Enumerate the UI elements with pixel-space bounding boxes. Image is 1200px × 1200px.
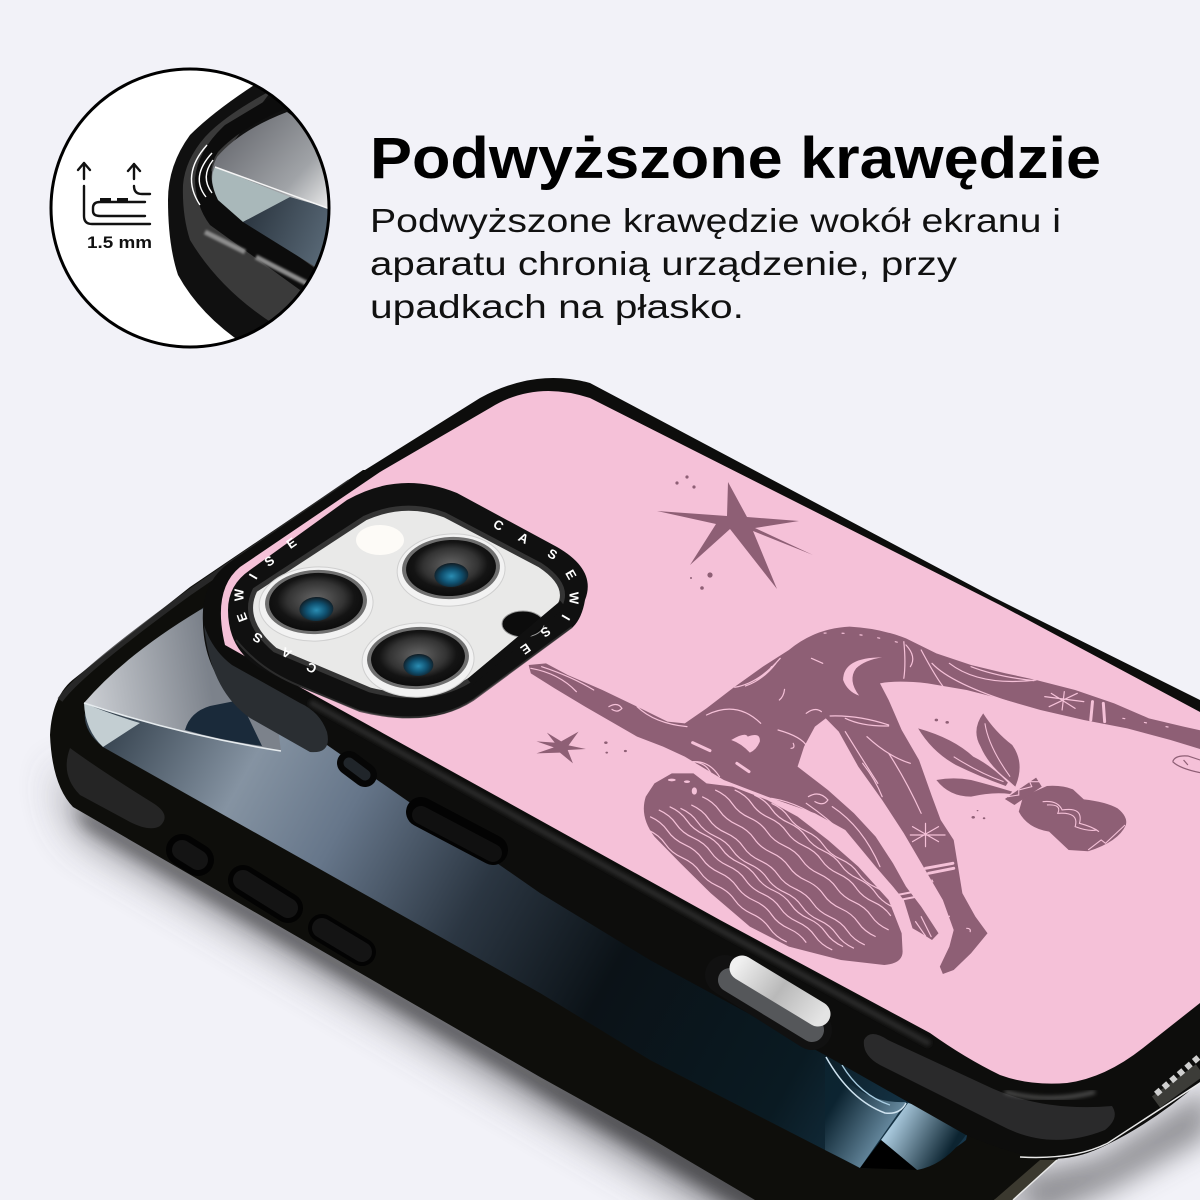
figure body silhouette: [529, 627, 1200, 974]
figure in zoomed coordinates: [529, 627, 1200, 974]
screen pale glass wedge: [84, 703, 140, 747]
ring text: CASEWISE twice: C: [303, 659, 319, 677]
charging port: [725, 968, 818, 1030]
sensor hole: [502, 611, 544, 637]
ring text: CASEWISE twice: E: [517, 640, 533, 658]
front band highlight: [310, 702, 930, 1044]
hair: [644, 773, 903, 965]
ring text: CASEWISE twice: [231, 516, 582, 677]
front left bumper: [204, 625, 328, 752]
detail circle: raised edge close-up: [50, 68, 330, 348]
description text: [370, 202, 1061, 325]
lens 2: [395, 531, 507, 609]
ring text: CASEWISE twice: I: [246, 571, 260, 582]
ring text: CASEWISE twice: I: [559, 612, 573, 623]
screen light curve: [84, 703, 281, 751]
screen grey top reflection: [84, 590, 281, 751]
face and head details: [668, 779, 697, 795]
title: Podwyższone krawędzie: [370, 126, 1101, 191]
flash: [356, 525, 404, 555]
ring text: CASEWISE twice: A: [278, 644, 294, 662]
ring text: CASEWISE twice: C: [491, 516, 507, 534]
description text: aparatu chronią urządzenie, przy: [370, 245, 958, 282]
pale glass: [212, 167, 290, 222]
glass highlight line: [215, 167, 330, 209]
front phone side buttons: [349, 763, 493, 853]
ring text: CASEWISE twice: S: [250, 629, 265, 647]
ring overlap over sensor: [470, 604, 563, 682]
phone shadow: [58, 770, 1200, 1200]
back phone screen: [85, 510, 980, 1168]
lens 3: [360, 620, 476, 700]
moon: [843, 657, 882, 696]
description text: Podwyższone krawędzie wokół ekranu i: [370, 202, 1061, 239]
camera ring: [228, 483, 588, 718]
icon: raised edge diagram: [78, 163, 150, 224]
ring text: CASEWISE twice: S: [545, 545, 560, 563]
lens 1: [257, 564, 375, 644]
front phone: black case with pink back: [203, 378, 1200, 1159]
ring text: CASEWISE twice: S: [262, 552, 278, 570]
speaker grille: [1156, 1070, 1200, 1102]
label: 1.5 mm: 1.5 mm: [87, 234, 152, 252]
ring text: CASEWISE twice: A: [516, 529, 532, 547]
description text: upadkach na płasko.: [370, 288, 744, 325]
back phone buttons: [182, 850, 362, 952]
ring text: CASEWISE twice: S: [537, 623, 553, 641]
front bottom bumper: [864, 1034, 1115, 1140]
camera bump: [228, 483, 588, 718]
ring text: CASEWISE twice: W: [567, 592, 582, 605]
hair waves: [648, 790, 893, 950]
small sun glyph at the edge: [1173, 756, 1200, 773]
screen blue light beams: [825, 1057, 966, 1170]
screen glass: [212, 112, 328, 266]
pink back panel: [221, 391, 1200, 1084]
lighter case band: [182, 94, 314, 321]
back phone bevel: [994, 1160, 1057, 1200]
ring text: CASEWISE twice: W: [231, 588, 246, 601]
band highlight: [205, 232, 310, 285]
ring text: CASEWISE twice: E: [284, 534, 300, 552]
body tattoo lines: [531, 633, 1184, 937]
heart: [731, 735, 760, 753]
screen dark blue reflection: [185, 700, 262, 746]
bevel highlight: [1005, 1092, 1095, 1098]
ring text: CASEWISE twice: E: [233, 610, 251, 624]
vase with plant: [918, 713, 1126, 851]
shock arcs: [191, 145, 213, 205]
illustration: stars, figure and vase: [529, 475, 1200, 974]
dark reflection: [243, 197, 328, 266]
camera module plate: [250, 508, 562, 696]
corner close-up of case: [168, 86, 292, 338]
small star: [536, 732, 627, 763]
back phone corner bumper: [67, 748, 165, 828]
lower ring edge highlight: [236, 627, 572, 717]
ring text: CASEWISE twice: E: [562, 567, 580, 582]
large star: [657, 475, 813, 590]
back phone: black case seen from the screen side: [50, 470, 1100, 1200]
